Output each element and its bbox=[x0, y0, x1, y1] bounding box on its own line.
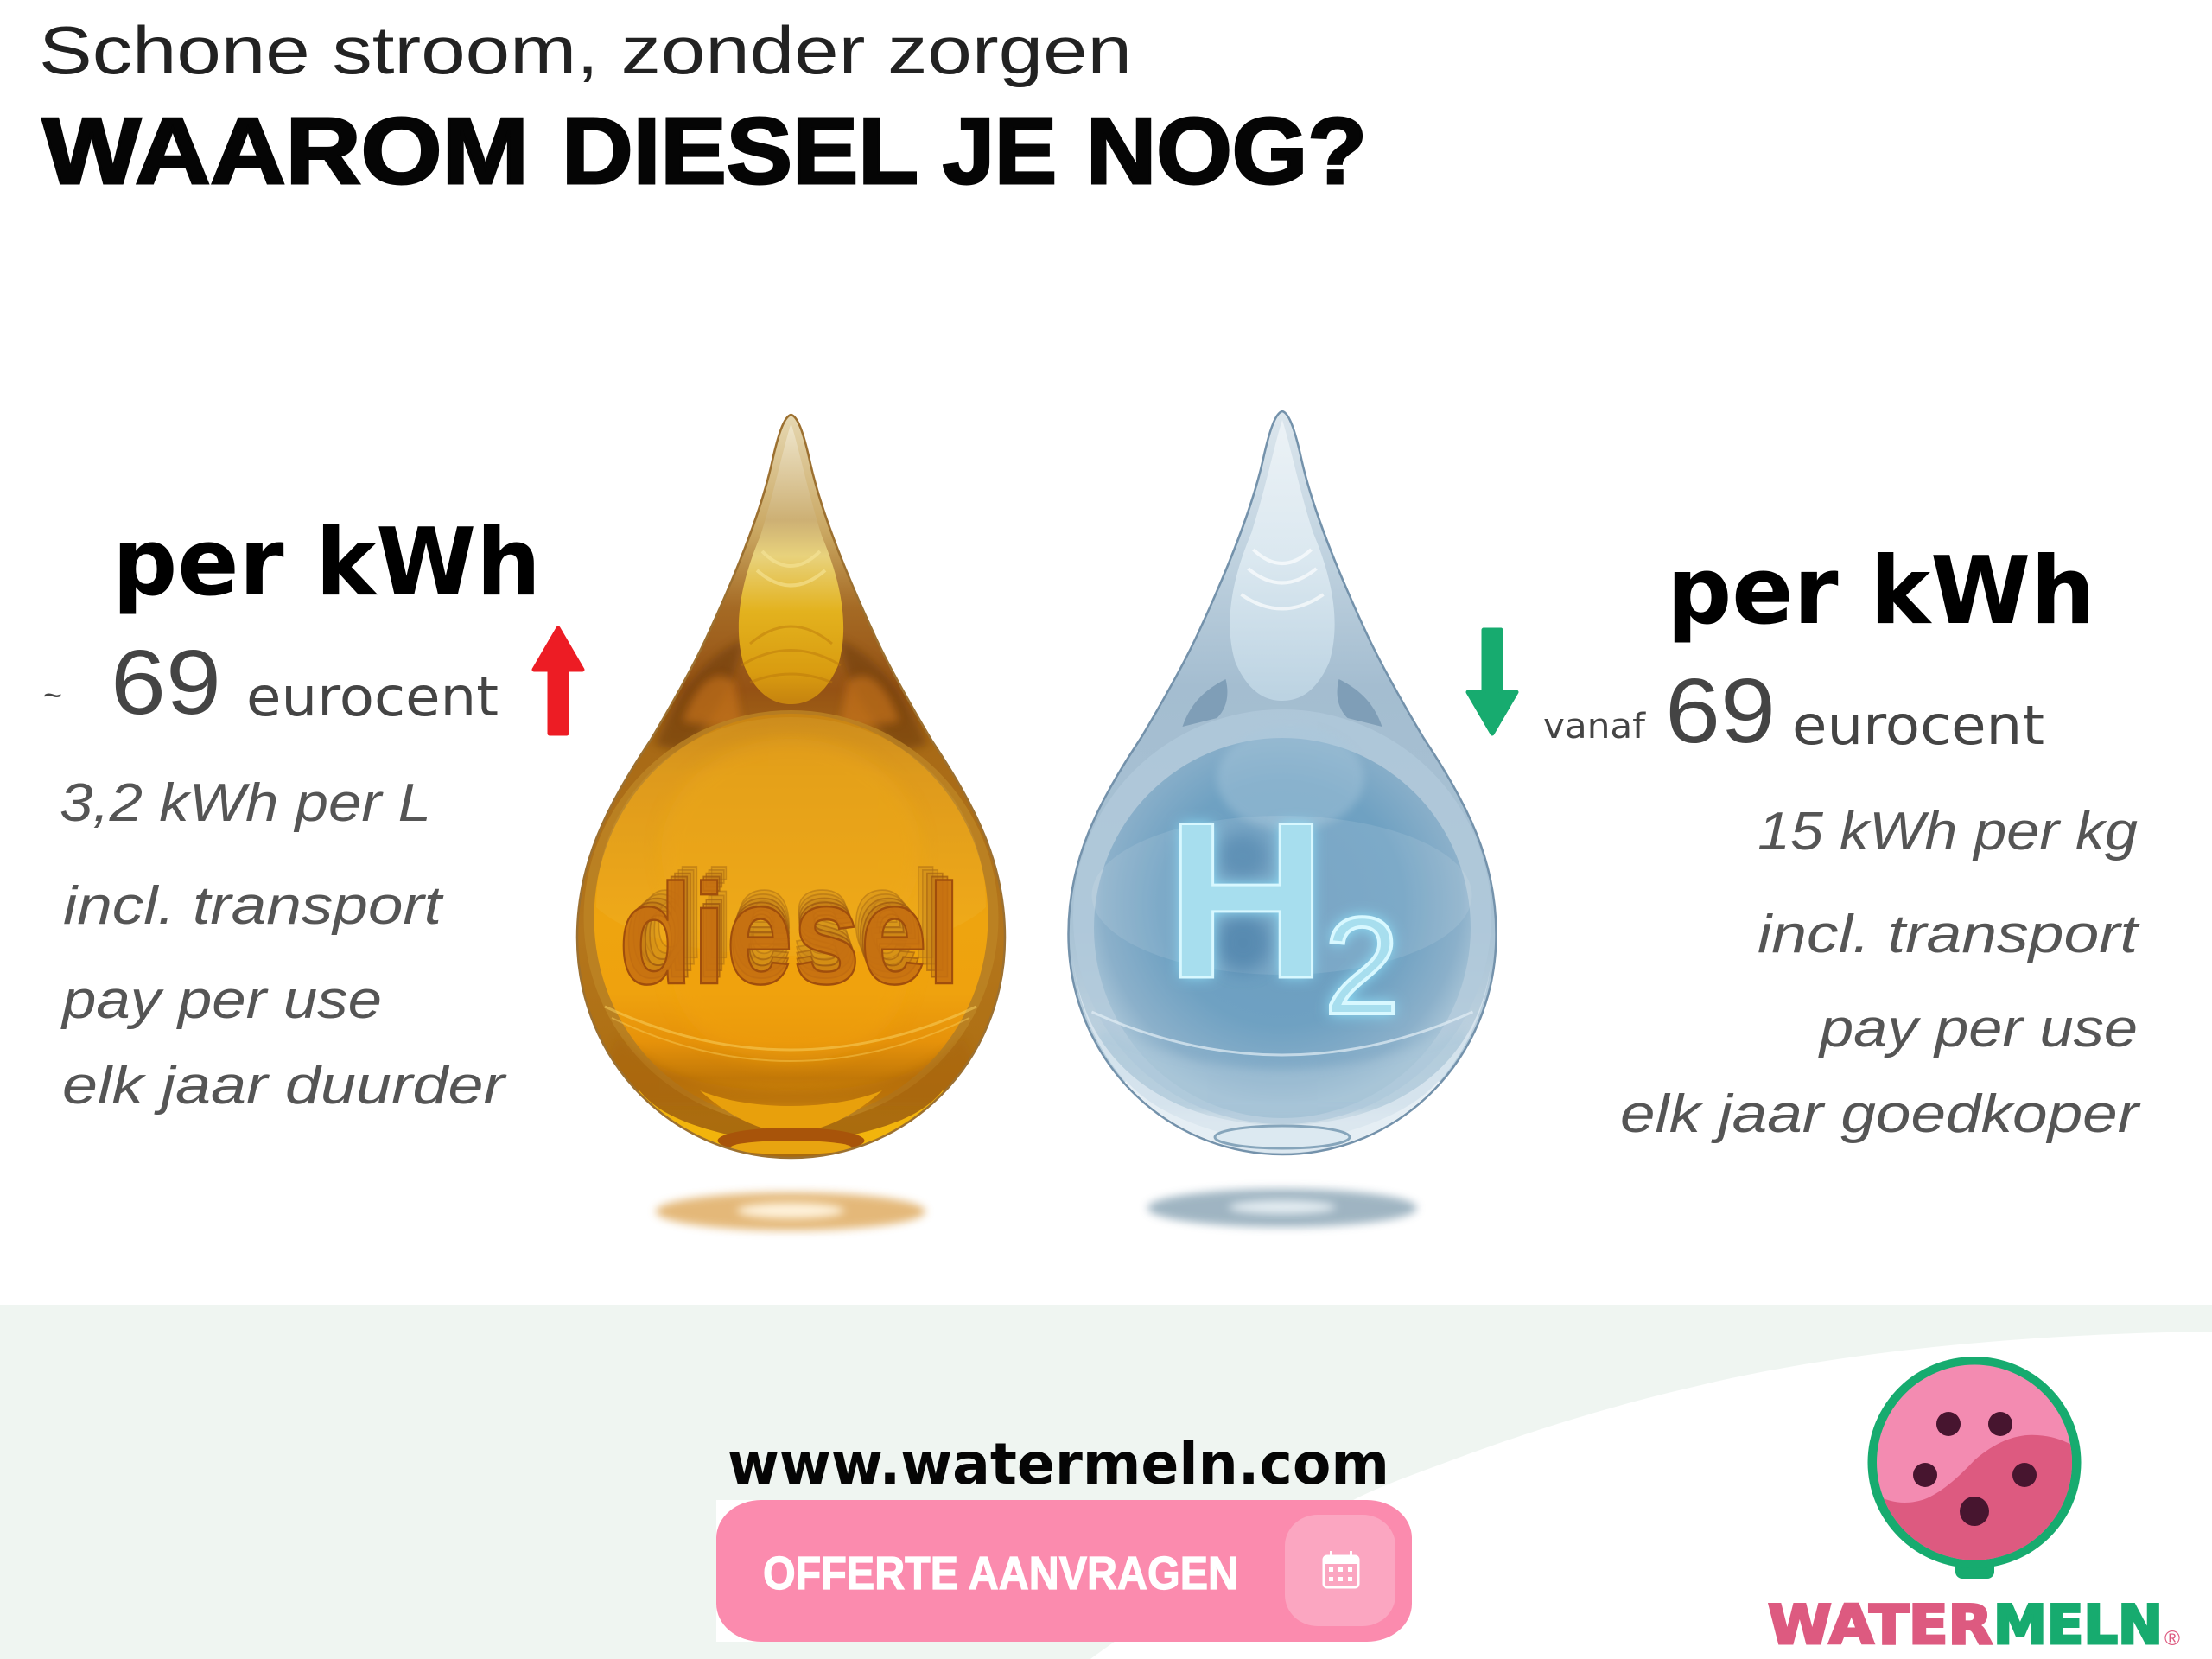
text: 69 price hydrogen: 69 bbox=[1665, 660, 1776, 762]
text: H2 glowing lettering: 2 bbox=[1324, 888, 1400, 1043]
title: main heading: NOG? bbox=[1086, 99, 1367, 204]
title: subtitle line: Schone stroom, zonder zorgen bbox=[39, 12, 1132, 88]
arrow: green down bbox=[1468, 630, 1516, 734]
icon: hydrogen drop bbox=[1061, 403, 1502, 1163]
button: offerte aanvragen bbox=[716, 1500, 1412, 1642]
logo wordmark: WATERMELN: WATER bbox=[1768, 1593, 1993, 1656]
icon: watermelon logo bbox=[1866, 1357, 2091, 1581]
text: elk jaar goedkoper: elk jaar goedkoper bbox=[1620, 1084, 2141, 1144]
text: vanaf: vanaf bbox=[1543, 707, 1646, 747]
title: main heading: JE bbox=[943, 99, 1057, 204]
text: diesel lettering inside drop: diesel bbox=[639, 844, 940, 984]
panel: diesel price text bbox=[43, 509, 541, 1116]
text: pay per use diesel: pay per use bbox=[60, 970, 382, 1030]
text: diesel lettering inside drop: diesel bbox=[624, 852, 956, 1007]
text: eurocent: eurocent bbox=[246, 665, 499, 728]
text: elk jaar duurder: elk jaar duurder bbox=[62, 1056, 507, 1116]
text: H2 glowing lettering: 2 bbox=[1324, 888, 1400, 1043]
icon: calendar tile bbox=[1285, 1515, 1395, 1626]
arrow: red up bbox=[534, 628, 582, 734]
heading: per kWh hydrogen: per kWh bbox=[1667, 537, 2095, 645]
text: diesel lettering inside drop: diesel bbox=[634, 847, 945, 992]
text: 69 price: 69 bbox=[111, 632, 221, 734]
logo wordmark: WATERMELN: MELN bbox=[1993, 1593, 2163, 1656]
title: main heading bbox=[42, 99, 1367, 204]
icon: diesel drop bbox=[570, 406, 1011, 1166]
text: approx sign: ~ bbox=[43, 677, 62, 713]
icon: hydrogen drop shadow bbox=[1147, 1189, 1417, 1227]
title: main heading: WAAROM bbox=[42, 99, 529, 204]
text: diesel lettering inside drop: diesel bbox=[619, 855, 961, 1014]
logo wordmark: WATERMELN bbox=[1768, 1593, 2180, 1656]
text: H2 glowing lettering: H bbox=[1166, 775, 1327, 1025]
text: button label: OFFERTE AANVRAGEN bbox=[763, 1548, 1238, 1599]
logo wordmark: WATERMELN: ® bbox=[2164, 1627, 2180, 1650]
text: eurocent hydrogen: eurocent bbox=[1792, 694, 2044, 757]
heading: per kWh diesel: per kWh bbox=[112, 509, 541, 617]
panel: footer background band bbox=[0, 1305, 2212, 1659]
text: pay per use hydrogen: pay per use bbox=[1818, 999, 2138, 1058]
text: energy density diesel: 3,2 kWh per L bbox=[60, 773, 431, 833]
text: energy density hydrogen: 15 kWh per kg bbox=[1758, 802, 2138, 861]
text: H2 glowing lettering: H bbox=[1166, 775, 1327, 1025]
title: main heading: DIESEL bbox=[562, 99, 918, 204]
text: incl transport hydrogen: incl. transport bbox=[1758, 905, 2140, 964]
text: H2 glowing lettering bbox=[1166, 775, 1400, 1043]
text: website url: www.watermeln.com bbox=[728, 1431, 1389, 1497]
text: diesel lettering inside drop: diesel bbox=[629, 849, 950, 999]
panel: hydrogen price text bbox=[1543, 537, 2141, 1144]
text: incl transport diesel: incl. transport bbox=[63, 876, 444, 936]
icon: diesel drop shadow bbox=[656, 1192, 925, 1230]
